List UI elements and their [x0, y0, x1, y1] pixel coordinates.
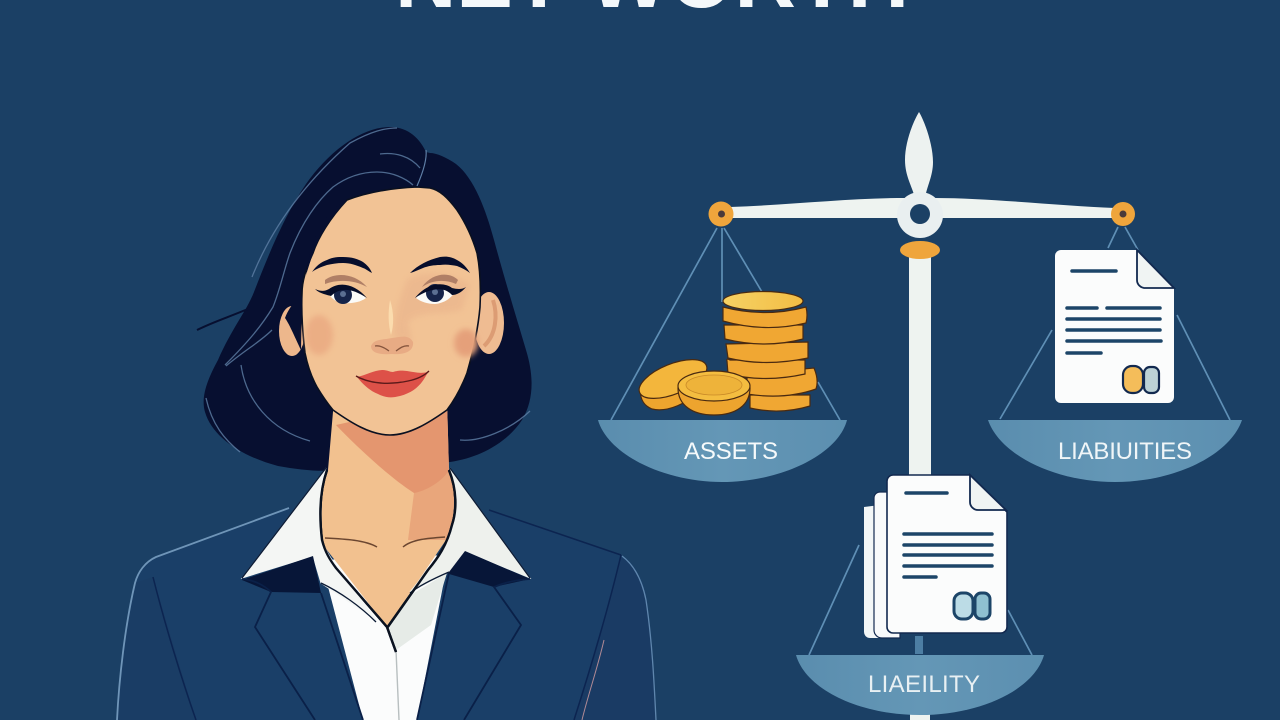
lapel shadows [242, 556, 321, 593]
left sleeve shade [117, 577, 196, 720]
ears [279, 306, 305, 356]
jacket [117, 508, 656, 720]
nose highlight [389, 300, 393, 335]
badge icon [954, 593, 973, 619]
pole base stub [910, 710, 930, 720]
lips [356, 370, 429, 397]
centre pan ropes [809, 545, 1032, 655]
right pivot [1111, 202, 1135, 226]
centre pan: liability [796, 655, 1044, 715]
back sheet [864, 505, 880, 638]
eye and nose shade [394, 274, 470, 342]
document: right pan [1055, 250, 1174, 403]
right pan: liabilities [988, 420, 1242, 482]
fold [1137, 250, 1174, 288]
left pivot [708, 202, 734, 226]
shirt placket [396, 650, 399, 720]
text lines [904, 493, 992, 577]
collarbones [325, 537, 445, 547]
orange collar [900, 241, 940, 259]
neckline [320, 470, 455, 652]
left eye [315, 275, 367, 304]
woman illustration [117, 127, 656, 720]
hair over forehead and ear [285, 200, 347, 350]
coin tilted [634, 352, 712, 410]
collar right [410, 468, 530, 592]
neck [322, 400, 454, 627]
hair back [204, 127, 532, 471]
shirt shaded side [387, 573, 447, 650]
left pan: assets [598, 420, 847, 482]
collar left [242, 468, 376, 620]
right sleeve shade [574, 557, 656, 720]
coins stack [723, 292, 817, 411]
middle sheet [874, 492, 900, 638]
sleeve seams [153, 510, 621, 720]
right eyebrow [410, 257, 470, 273]
badge icon [1123, 366, 1143, 393]
right pan ropes [1000, 227, 1230, 420]
left pan ropes [611, 228, 840, 420]
fold [970, 475, 1006, 510]
front sheet [887, 475, 1007, 633]
text lines [1067, 271, 1161, 353]
collar lines [242, 468, 530, 622]
neck shadow [408, 470, 454, 540]
centre ring [897, 192, 943, 238]
document stack: centre [864, 475, 1007, 638]
coin front [678, 371, 750, 415]
shoulder highlights [117, 508, 289, 720]
nose tip [371, 337, 413, 354]
label: liabilities: LIABIUITIES [1058, 438, 1192, 465]
balance beam [730, 198, 1115, 218]
label: liability: LIAEILITY [868, 671, 980, 698]
shirt [321, 555, 449, 720]
label: assets: ASSETS [684, 438, 778, 465]
face [302, 187, 480, 435]
lapel outlines [242, 573, 530, 720]
hair highlights [206, 128, 530, 452]
left eyebrow [312, 257, 372, 273]
scale pole [909, 255, 931, 480]
hair flyaway strands [197, 308, 250, 330]
cheek blush [305, 315, 333, 355]
balance scale [598, 112, 1242, 720]
jacket body [117, 508, 656, 720]
right eye [415, 275, 466, 304]
spike finial [905, 112, 933, 198]
